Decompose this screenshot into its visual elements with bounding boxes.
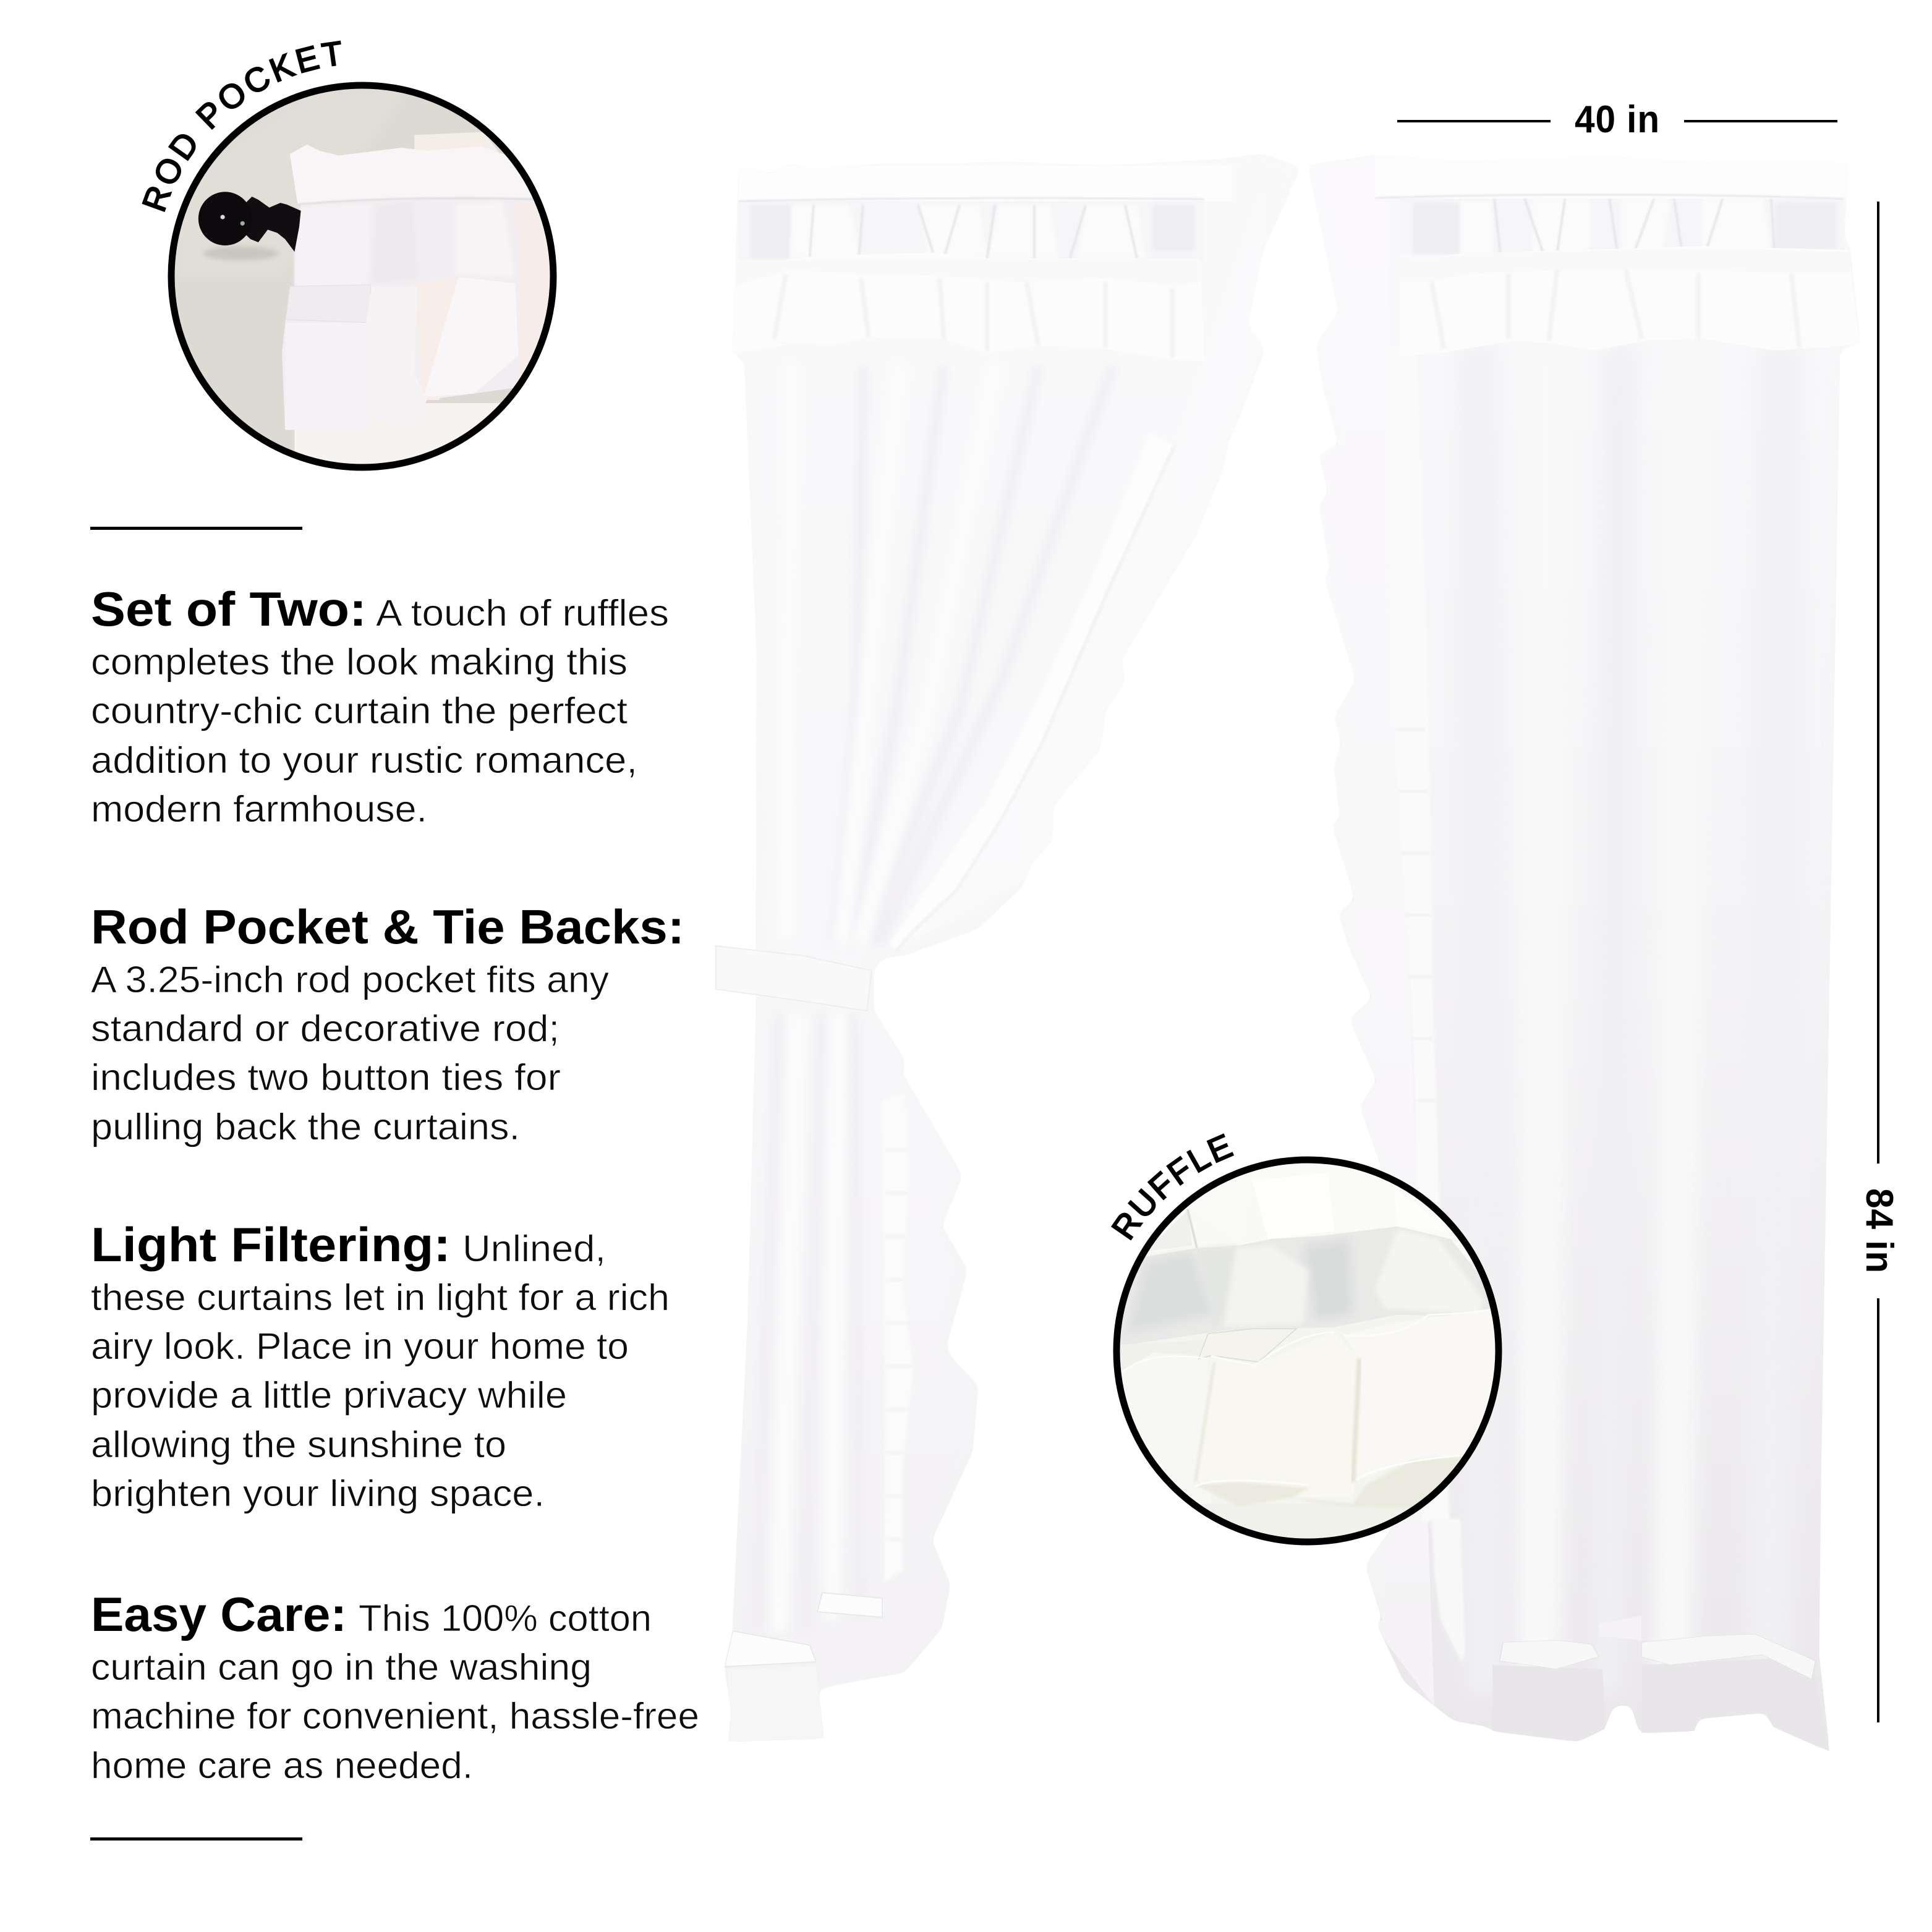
- text block: rod pocket and tie backs: standard or decorative rod;: [91, 1008, 560, 1049]
- label: ruffle: RUFFLE: [1111, 1133, 1234, 1240]
- text block: easy care: Easy Care:: [91, 1587, 347, 1641]
- text block: easy care: home care as needed.: [91, 1745, 473, 1786]
- valance left: [738, 197, 1204, 258]
- upper ruffle folds: [294, 205, 370, 286]
- text block: set of two: A touch of ruffles: [376, 592, 669, 634]
- circle inset: ruffle: [1111, 1133, 1502, 1546]
- wall light wash: [175, 88, 408, 277]
- text block: light filtering: Unlined,: [462, 1228, 606, 1269]
- shaded gather row: [1120, 1227, 1501, 1346]
- bottom ruffles: [728, 1734, 823, 1742]
- right curtain panel: [1298, 155, 1860, 1751]
- dimension: height 84 in: 84 in: [1858, 1188, 1900, 1274]
- rod pocket: [290, 145, 566, 205]
- circle inset: rod pocket: [142, 41, 556, 471]
- outer ruffle tone: [895, 185, 1263, 952]
- text block: set of two: addition to your rustic romance,: [91, 739, 637, 781]
- finial shadow: [203, 247, 279, 260]
- text block: rod pocket and tie backs: [91, 900, 684, 1147]
- upper band tabs: [1113, 1160, 1504, 1261]
- sheer panel below: [294, 403, 566, 482]
- text block: easy care: machine for convenient, hassle-free: [91, 1695, 699, 1737]
- pleated ruffle strip: [1415, 1004, 1449, 1521]
- text block: easy care: This 100% cotton: [359, 1598, 652, 1639]
- text block: easy care: [91, 1587, 699, 1786]
- text block: rod pocket and tie backs: pulling back the curtains.: [91, 1106, 520, 1147]
- pleated strip lower: [886, 1575, 890, 1578]
- text block: easy care: curtain can go in the washing: [91, 1646, 592, 1688]
- vertical fold tones: [1517, 1131, 1692, 1667]
- label: rod pocket: ROD POCKET: [142, 41, 341, 212]
- rail bracket: [414, 132, 503, 157]
- bottom ruffle right: [1492, 1615, 1829, 1751]
- under-hem shadow: [1120, 1504, 1498, 1554]
- text block: light filtering: these curtains let in light for a rich: [91, 1277, 670, 1318]
- text block: light filtering: airy look. Place in your home to: [91, 1326, 629, 1367]
- text block: set of two: [91, 582, 669, 830]
- bottom divider: [90, 1837, 302, 1841]
- text block: light filtering: brighten your living space.: [91, 1473, 545, 1514]
- body folds: [754, 365, 1113, 1632]
- dimension: width 40 in: [1397, 98, 1837, 141]
- text block: light filtering: Light Filtering:: [91, 1217, 451, 1272]
- left curtain panel: [716, 154, 1301, 1742]
- text block: set of two: country-chic curtain the perfect: [91, 690, 628, 731]
- text block: set of two: completes the look making this: [91, 641, 628, 683]
- dimension: width 40 in: 40 in: [1575, 98, 1660, 141]
- edge strip upper: [890, 433, 1175, 952]
- valance right: [1375, 155, 1860, 357]
- curtain body: [282, 145, 566, 430]
- rod and finial: [244, 197, 301, 252]
- text block: rod pocket and tie backs: includes two button ties for: [91, 1057, 561, 1098]
- text block: rod pocket and tie backs: A 3.25-inch rod pocket fits any: [91, 959, 609, 1000]
- text block: light filtering: provide a little privacy while: [91, 1374, 567, 1416]
- text block: rod pocket and tie backs: Rod Pocket & Tie Backs:: [91, 900, 684, 954]
- text block: light filtering: allowing the sunshine to: [91, 1424, 506, 1465]
- tie back band: [716, 946, 872, 1011]
- dimension: height 84 in: [1858, 202, 1900, 1722]
- text block: set of two: Set of Two:: [91, 582, 367, 636]
- outer ruffle lighter: [1367, 1510, 1434, 1705]
- text block: light filtering: [91, 1217, 670, 1514]
- text block: set of two: modern farmhouse.: [91, 788, 427, 830]
- lower ruffle lobes: [1120, 1353, 1211, 1510]
- top divider: [90, 527, 302, 530]
